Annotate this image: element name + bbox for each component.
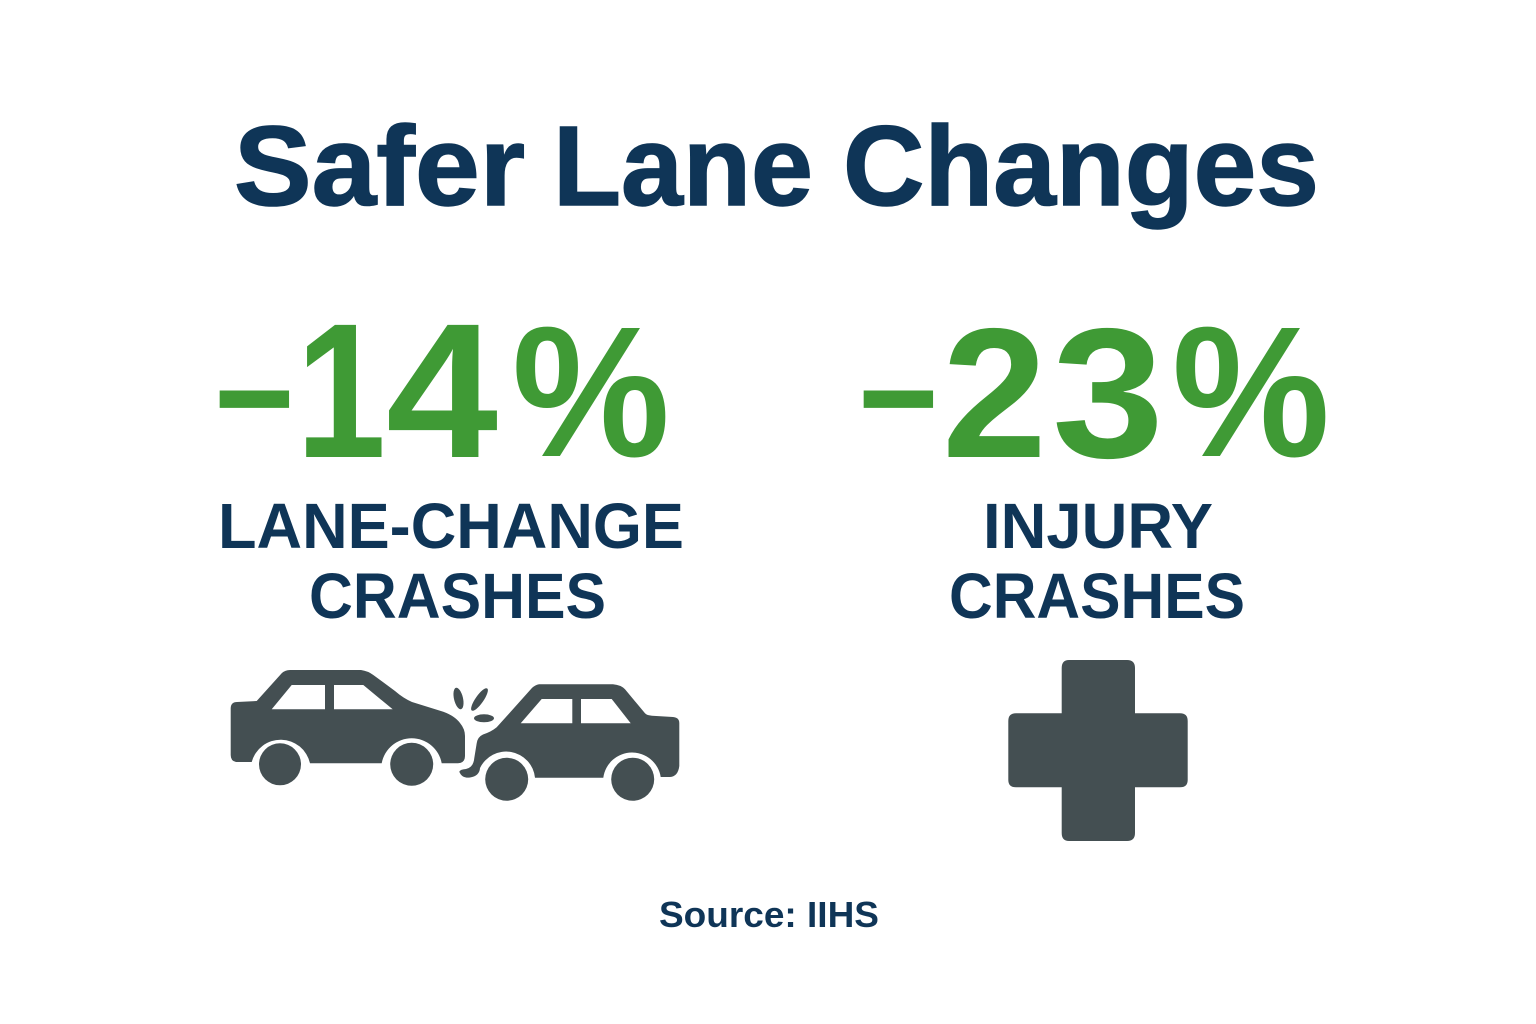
title: Changes <box>843 103 1319 229</box>
icon: medical cross <box>1008 660 1188 841</box>
icon: two cars colliding <box>231 670 679 801</box>
stat: injury crashes reduction: 2 <box>942 291 1047 497</box>
label: injury crashes: INJURY <box>983 490 1213 562</box>
label: injury crashes <box>949 490 1245 632</box>
title <box>234 103 1319 229</box>
stat: lane-change crashes reduction: 1 <box>296 283 386 498</box>
label: lane-change crashes: CRASHES <box>309 560 606 632</box>
left car <box>231 670 465 786</box>
right car <box>459 684 679 801</box>
stat: lane-change crashes reduction: % <box>512 289 670 496</box>
impact sparks <box>452 686 494 722</box>
stat: lane-change crashes reduction <box>209 283 670 498</box>
stat: injury crashes reduction: - <box>853 305 944 468</box>
source note: Source: IIHS <box>659 894 879 935</box>
label: injury crashes: CRASHES <box>949 560 1245 632</box>
label: lane-change crashes: LANE-CHANGE <box>218 490 684 562</box>
stat: injury crashes reduction: 3 <box>1052 291 1164 497</box>
title: Lane <box>553 103 813 229</box>
title: Safer <box>234 103 525 229</box>
stat: injury crashes reduction <box>853 289 1330 497</box>
stat: injury crashes reduction: % <box>1172 289 1330 496</box>
stat: lane-change crashes reduction: 4 <box>386 283 498 498</box>
label: lane-change crashes <box>218 490 684 632</box>
stat: lane-change crashes reduction: - <box>209 305 300 468</box>
